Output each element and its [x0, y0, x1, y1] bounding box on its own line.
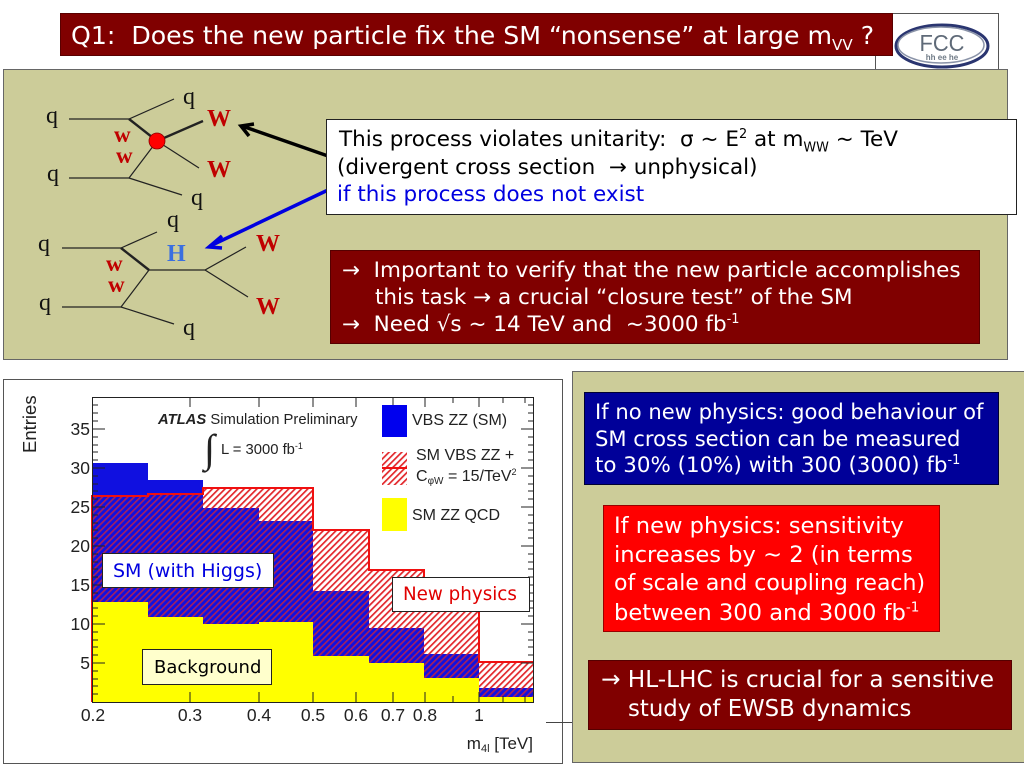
axis labels: 5: [80, 653, 90, 673]
yellow background histogram: [92, 602, 534, 702]
callout: closure test: this task → a crucial “closure test” of the SM: [375, 285, 853, 310]
legend: [382, 405, 517, 531]
label: New physics: New physics: [403, 584, 517, 605]
callout: no new physics: SM cross section can be measured: [595, 426, 960, 451]
icon: FCC logo: [896, 25, 988, 67]
axis labels: 20: [71, 536, 90, 556]
diagram labels: q: [46, 103, 58, 129]
callout: new physics: If new physics: sensitivity: [614, 513, 904, 539]
legend: VBS ZZ (SM): [412, 412, 507, 429]
callout: no new physics: to 30% (10%) with 300 (3000) fb-1: [595, 453, 960, 478]
axis labels: m: [467, 734, 481, 753]
icon: FCC logo: FCC: [920, 30, 964, 56]
axis labels: 0.3: [178, 705, 202, 725]
diagram labels: q: [39, 290, 51, 316]
hatched new physics histogram: [92, 488, 534, 702]
axis labels: 4l: [481, 743, 490, 755]
axis labels: 0.8: [413, 705, 437, 725]
ATLAS annotation: ATLAS Simulation Preliminary: [157, 412, 358, 428]
callout: HL-LHC: → HL-LHC is crucial for a sensitive: [601, 666, 994, 693]
callout: unitarity violation: if this process does not exist: [337, 182, 644, 207]
W boson labels: w: [108, 272, 125, 297]
axis labels: 0.7: [381, 705, 405, 725]
W boson labels: W: [207, 106, 231, 132]
axis labels: 1: [474, 705, 484, 725]
connector line: [546, 722, 572, 723]
axis labels: 0.6: [344, 705, 368, 725]
diagram labels: q: [183, 84, 195, 110]
callout: closure test: [330, 250, 980, 344]
diagram labels: q: [38, 231, 50, 257]
diagram labels: q: [47, 161, 59, 187]
callout: HL-LHC: [588, 660, 1012, 730]
callout: new physics: increases by ~ 2 (in terms: [614, 542, 913, 568]
axis labels: [19, 395, 533, 755]
logo box: [875, 13, 999, 70]
arrow: to contact diagram: [241, 124, 328, 156]
legend: φW: [428, 476, 444, 487]
diagram: Higgs exchange: [62, 232, 248, 324]
callout: unitarity violation: [326, 119, 1017, 215]
callout: unitarity violation: This process violates unitarity: σ ~ E2 at mWW ~ TeV: [339, 127, 898, 155]
bar chart: m4l distribution: [19, 395, 534, 755]
axis labels: Entries: [19, 395, 40, 453]
panel: conclusions: [572, 371, 1024, 763]
axis labels: [TeV]: [490, 734, 533, 753]
Higgs label: H: [167, 241, 186, 267]
red outline: [92, 488, 534, 702]
diagram: contact WW scattering: [69, 99, 203, 195]
diagram labels: q: [167, 207, 179, 233]
axis labels: 0.4: [247, 705, 271, 725]
arrow: to Higgs diagram: [209, 190, 328, 248]
panel: top process panel: [3, 69, 1008, 360]
axis labels: 0.5: [301, 705, 325, 725]
panel: ATLAS chart: [3, 379, 563, 764]
callout: new physics: between 300 and 3000 fb-1: [614, 599, 919, 626]
legend: = 15/TeV: [444, 468, 512, 485]
W boson labels: [106, 106, 280, 320]
callout: unitarity violation: (divergent cross section → unphysical): [337, 155, 758, 180]
icon: FCC logo: hh ee he: [926, 53, 959, 62]
Feynman diagrams: [38, 84, 326, 341]
ATLAS annotation: [157, 412, 358, 473]
legend: SM VBS ZZ +: [416, 447, 514, 464]
diagram labels: q: [191, 185, 203, 211]
W boson labels: W: [256, 294, 280, 320]
overlay hatch on blue: [92, 494, 534, 702]
W boson labels: W: [256, 231, 280, 257]
callout: closure test: → Need √s ~ 14 TeV and ~3000 fb-1: [342, 312, 740, 337]
blue SM histogram: [92, 463, 534, 702]
axis labels: 25: [71, 497, 90, 517]
legend: C: [416, 468, 428, 485]
ATLAS annotation: ∫: [201, 426, 218, 473]
axis labels: 35: [71, 419, 90, 439]
legend: SM ZZ QCD: [412, 507, 500, 524]
axes and ticks: [92, 397, 534, 702]
callout: no new physics: If no new physics: good behaviour of: [595, 399, 983, 424]
callout: no new physics: [584, 392, 999, 485]
callout: closure test: → Important to verify that the new particle accomplishes: [342, 258, 961, 283]
callout: new physics: [603, 505, 940, 632]
diagram labels: [38, 84, 203, 341]
label: New physics: [392, 577, 530, 612]
label: SM with Higgs: [102, 553, 274, 588]
W boson labels: w: [106, 251, 123, 276]
callout: new physics: of scale and coupling reach): [614, 571, 925, 596]
W boson labels: w: [116, 143, 133, 168]
label: Background: [142, 649, 272, 685]
label: SM with Higgs: SM (with Higgs): [113, 560, 262, 582]
title bar: Q1: Does the new particle fix the SM “nonsense” at large mVV ?: [71, 21, 874, 54]
axis labels: 10: [71, 614, 90, 634]
label: Background: Background: [154, 657, 261, 678]
axis labels: 30: [71, 458, 90, 478]
W boson labels: w: [114, 122, 131, 147]
W boson labels: W: [207, 157, 231, 183]
axis labels: 15: [71, 575, 90, 595]
axis labels: 0.2: [81, 705, 105, 725]
callout: HL-LHC: study of EWSB dynamics: [628, 696, 911, 722]
legend: 2: [512, 467, 517, 477]
diagram labels: q: [183, 315, 195, 341]
ATLAS annotation: L = 3000 fb: [221, 442, 295, 458]
ATLAS annotation: -1: [295, 441, 303, 451]
